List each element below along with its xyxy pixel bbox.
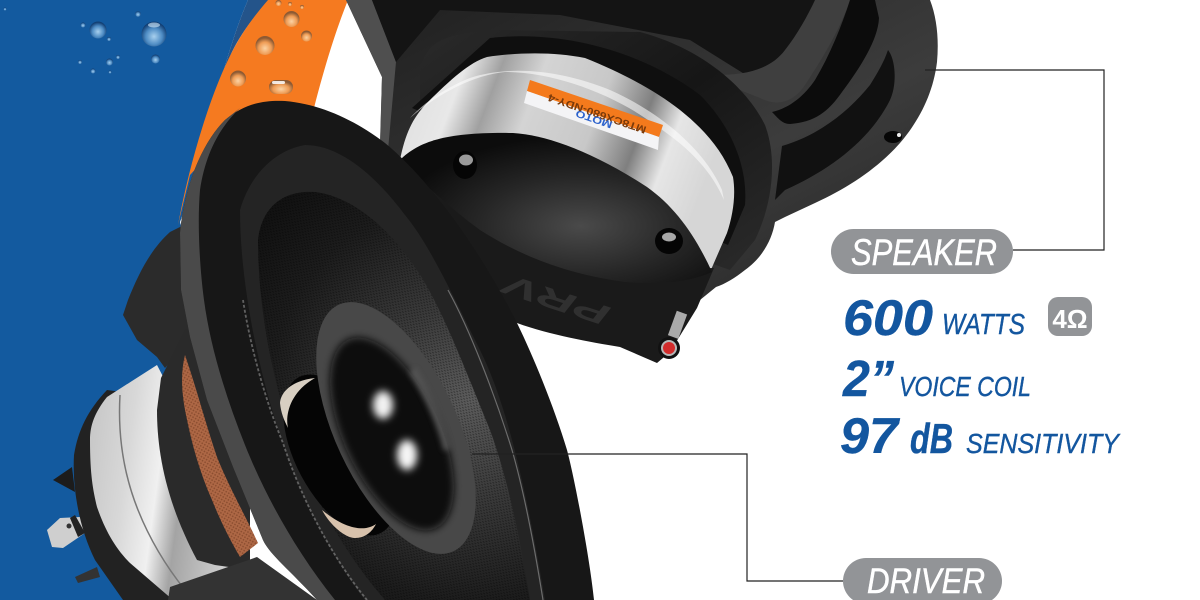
spec: sensitivity bbox=[840, 408, 1121, 464]
black outer frame bbox=[180, 101, 594, 600]
spec: voice coil bbox=[842, 350, 1031, 407]
basket window upper bbox=[772, 0, 879, 124]
dust cap bbox=[283, 279, 509, 577]
dust cap sheen bbox=[412, 370, 447, 450]
spec: 600 watts: 600 bbox=[843, 290, 933, 346]
dust cap rim bbox=[283, 279, 509, 577]
front driver basket and magnet bbox=[47, 222, 317, 600]
terminal post bbox=[658, 311, 687, 359]
frame mounting hole bbox=[884, 131, 902, 143]
model label: MT8CX680-NDY-4 bbox=[546, 91, 648, 136]
model label bbox=[524, 80, 663, 150]
spec: sensitivity: dB bbox=[910, 415, 953, 462]
copper spider bbox=[182, 355, 258, 557]
cap screw right bbox=[655, 228, 683, 254]
spec: 600 watts bbox=[843, 290, 1026, 346]
impedance badge bbox=[1048, 297, 1092, 336]
black magnet back bbox=[74, 390, 180, 600]
grey frame edge at top left bbox=[346, 0, 396, 150]
blue background swoosh bbox=[0, 0, 248, 600]
woven cone bbox=[258, 192, 530, 600]
cap screw left bbox=[453, 151, 477, 179]
basket window lower bbox=[775, 50, 895, 200]
voice coil opening bbox=[260, 357, 420, 553]
dust cap shadow bbox=[305, 319, 479, 549]
highlight band on magnet ring bbox=[410, 71, 724, 200]
model label: MOTO bbox=[574, 107, 614, 130]
rear basket collar bbox=[420, 30, 772, 270]
speaker leader line bbox=[925, 70, 1104, 250]
grey rim edge bbox=[180, 108, 335, 600]
black magnet cap bbox=[400, 133, 712, 283]
spec: voice coil: 2” bbox=[842, 350, 894, 407]
driver badge: DRIVER bbox=[867, 562, 985, 600]
driver leader line bbox=[472, 454, 843, 581]
molded logo: PRV bbox=[495, 267, 614, 332]
terminal pin upper bbox=[53, 467, 75, 492]
water droplets on blue bbox=[4, 8, 166, 74]
rear cone fabric bbox=[372, 0, 850, 90]
spec: sensitivity: SENSITIVITY bbox=[966, 428, 1121, 459]
dust cap highlight upper bbox=[373, 391, 393, 419]
spec: voice coil: VOICE COIL bbox=[899, 371, 1031, 402]
water droplets on orange bbox=[230, 0, 312, 94]
lower basket tab bbox=[168, 557, 317, 600]
rear speaker frame bbox=[346, 0, 938, 300]
dark blue accent sliver bbox=[180, 0, 270, 222]
basket arm bbox=[715, 0, 850, 102]
dark inner basket bbox=[157, 320, 250, 570]
upper basket tab bbox=[123, 222, 190, 368]
spec: 600 watts: WATTS bbox=[942, 309, 1026, 341]
surround highlight edges bbox=[243, 300, 367, 600]
silver magnet side bbox=[90, 365, 250, 600]
front speaker bbox=[180, 101, 594, 600]
dust cap highlight lower bbox=[397, 440, 417, 470]
black seat around magnet bbox=[412, 36, 745, 245]
fuzzy surround bbox=[240, 145, 545, 600]
bright seam of surround bbox=[448, 290, 543, 600]
impedance badge: 4Ω bbox=[1052, 304, 1088, 334]
silver groove bbox=[120, 395, 185, 590]
chrome terminal bbox=[47, 515, 85, 548]
speaker badge: SPEAKER bbox=[851, 232, 997, 273]
orange swoosh bbox=[178, 0, 348, 225]
black molded PRV ring bbox=[402, 160, 714, 363]
cone weave texture bbox=[258, 192, 530, 600]
rear speaker bbox=[346, 0, 938, 363]
terminal pin lower bbox=[75, 567, 100, 583]
silver magnet ring bbox=[400, 53, 734, 272]
spec: sensitivity: 97 bbox=[840, 408, 900, 464]
